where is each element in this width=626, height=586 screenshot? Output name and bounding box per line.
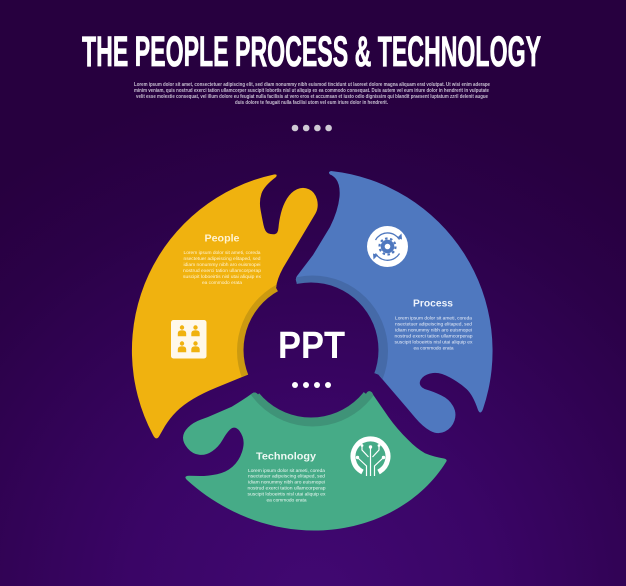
process heading: Process (413, 298, 453, 310)
technology text: suscipit loboeirtis nisl utai aliquip ex (248, 491, 326, 497)
people text (183, 250, 262, 286)
people text: ea commodo erata (202, 280, 242, 286)
panel: process (296, 171, 493, 434)
people inner shadow (237, 284, 278, 378)
icon: gear cycle (367, 226, 408, 267)
center circle (244, 282, 378, 418)
process text: nostrud exerci tation ullamcorperap (394, 334, 473, 340)
people heading: People (204, 234, 240, 244)
center PPT text: PPT (278, 325, 345, 367)
intro text block (134, 82, 490, 106)
people text: suscipit loboeirtis nisl utai aliquip ex (183, 274, 262, 280)
technology segment shape (183, 350, 447, 530)
people text: Lorem ipsum dolor sit ameti, coreda (184, 250, 261, 256)
technology text: nostrud exerci tation ullamcorperap (248, 486, 326, 492)
people text: nsectetuer adipeiscing elitaped, sed (184, 256, 261, 262)
technology heading: Technology (256, 450, 316, 462)
technology text: nsectetuer adipeiscing elitaped, sed (248, 474, 325, 480)
people segment shape (132, 174, 318, 438)
intro text block: duis dolore te feugait nulla facilisi utom vel eum iriure dolor in hendrerit. (235, 100, 389, 106)
technology text: ea commodo erata (266, 497, 307, 503)
header dots (292, 125, 332, 131)
technology text: Lorem ipsum dolor sit ameti, coreda (248, 468, 325, 474)
technology text: idiam nonummy nibh aro euismopei (248, 480, 325, 486)
icon: people grid (171, 320, 206, 358)
panel: technology (183, 391, 447, 530)
people text: idiam nonummy nibh aro euismopei (184, 262, 260, 268)
intro text block: Lorem ipsum dolor sit amet, consectetuer adipiscing elit, sed diam nonummy nibh euismod tincidunt ut laoreet dolore magna aliquam erat volutpat. Ut wisi enim aderape (134, 82, 490, 88)
technology inner shadow (250, 391, 374, 426)
process text: Lorem ipsum dolor sit ameti, coreda (395, 316, 472, 322)
panel: people (132, 174, 318, 438)
process text: idiam nonummy nibh aro euismopei (395, 328, 472, 334)
people text: nostrud exerci tation ullamcorperap (183, 268, 261, 274)
center dots (292, 382, 331, 388)
technology text (248, 468, 326, 503)
process segment shape (296, 171, 493, 433)
process text: suscipit loboeirtis nisl utai aliquip ex (394, 340, 473, 346)
process text: ea commodo erata (414, 346, 454, 352)
intro text block: minim veniam, quis nostrud exerci tation ullamcorper suscipit lobortis nisl ut aliquip ex ea commodo consequat. Duis autem vel eum iriure dolor in hendrerit in vulputate (134, 88, 489, 94)
process inner shadow (296, 276, 388, 380)
intro text block: velit esse molestie consequat, vel illum dolore eu feugiat nulla facilisis at vero eros et accumsan et iusto odio dignissim qui blandit praesent luptatum zzril delenit augue (136, 94, 488, 100)
process text: nsectetuer adipeiscing elitaped, sed (395, 322, 472, 328)
process text (394, 316, 473, 352)
center label (244, 282, 378, 418)
icon: circuit tree (353, 439, 388, 476)
